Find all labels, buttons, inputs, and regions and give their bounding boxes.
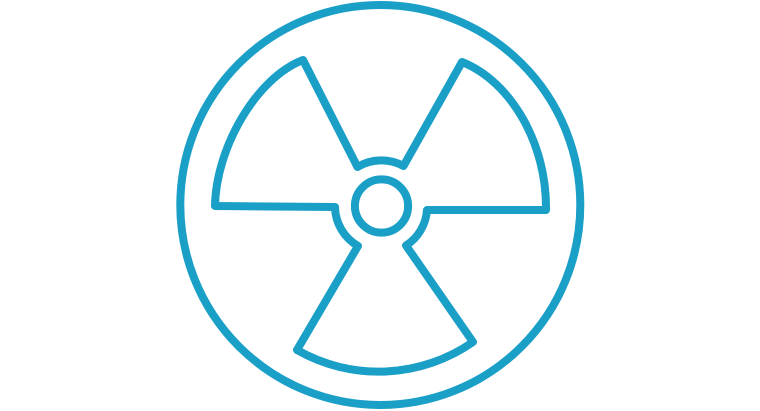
trefoil blades outline [215, 60, 546, 372]
centre circle [355, 179, 408, 233]
outer ring [180, 5, 580, 405]
